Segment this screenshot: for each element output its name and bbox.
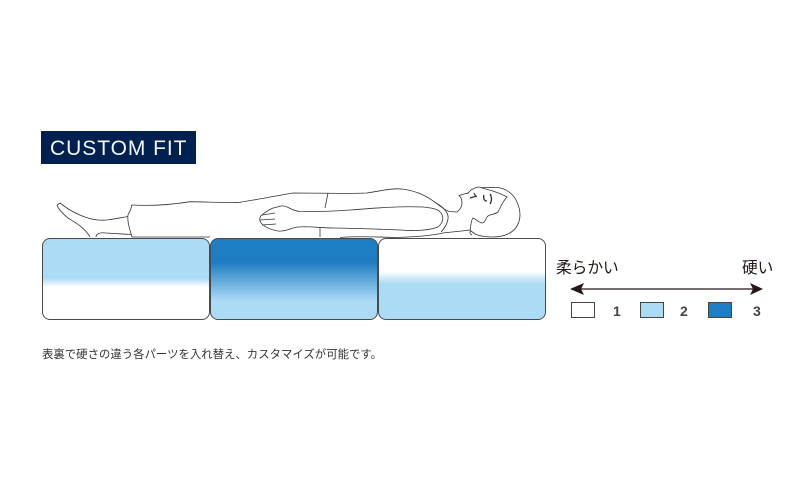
legend swatch 3 [708, 302, 732, 318]
label: hard: 硬い [742, 260, 773, 277]
title banner: CUSTOM FIT [50, 137, 187, 160]
legend number 1: 1 [613, 303, 621, 319]
mattress section 3 [378, 238, 546, 320]
caption: 表裏で硬さの違う各パーツを入れ替え、カスタマイズが可能です。 [42, 349, 382, 361]
figure lying down [56, 186, 520, 238]
legend swatch 2 [640, 302, 664, 318]
title banner [41, 131, 196, 164]
legend swatch 1 [571, 302, 595, 318]
legend number 2: 2 [680, 303, 688, 319]
arrow: firmness scale [570, 283, 763, 295]
mattress section 2 [210, 238, 378, 320]
mattress section 1 [42, 238, 210, 320]
legend number 3: 3 [753, 303, 761, 319]
label: soft: 柔らかい [556, 260, 619, 277]
